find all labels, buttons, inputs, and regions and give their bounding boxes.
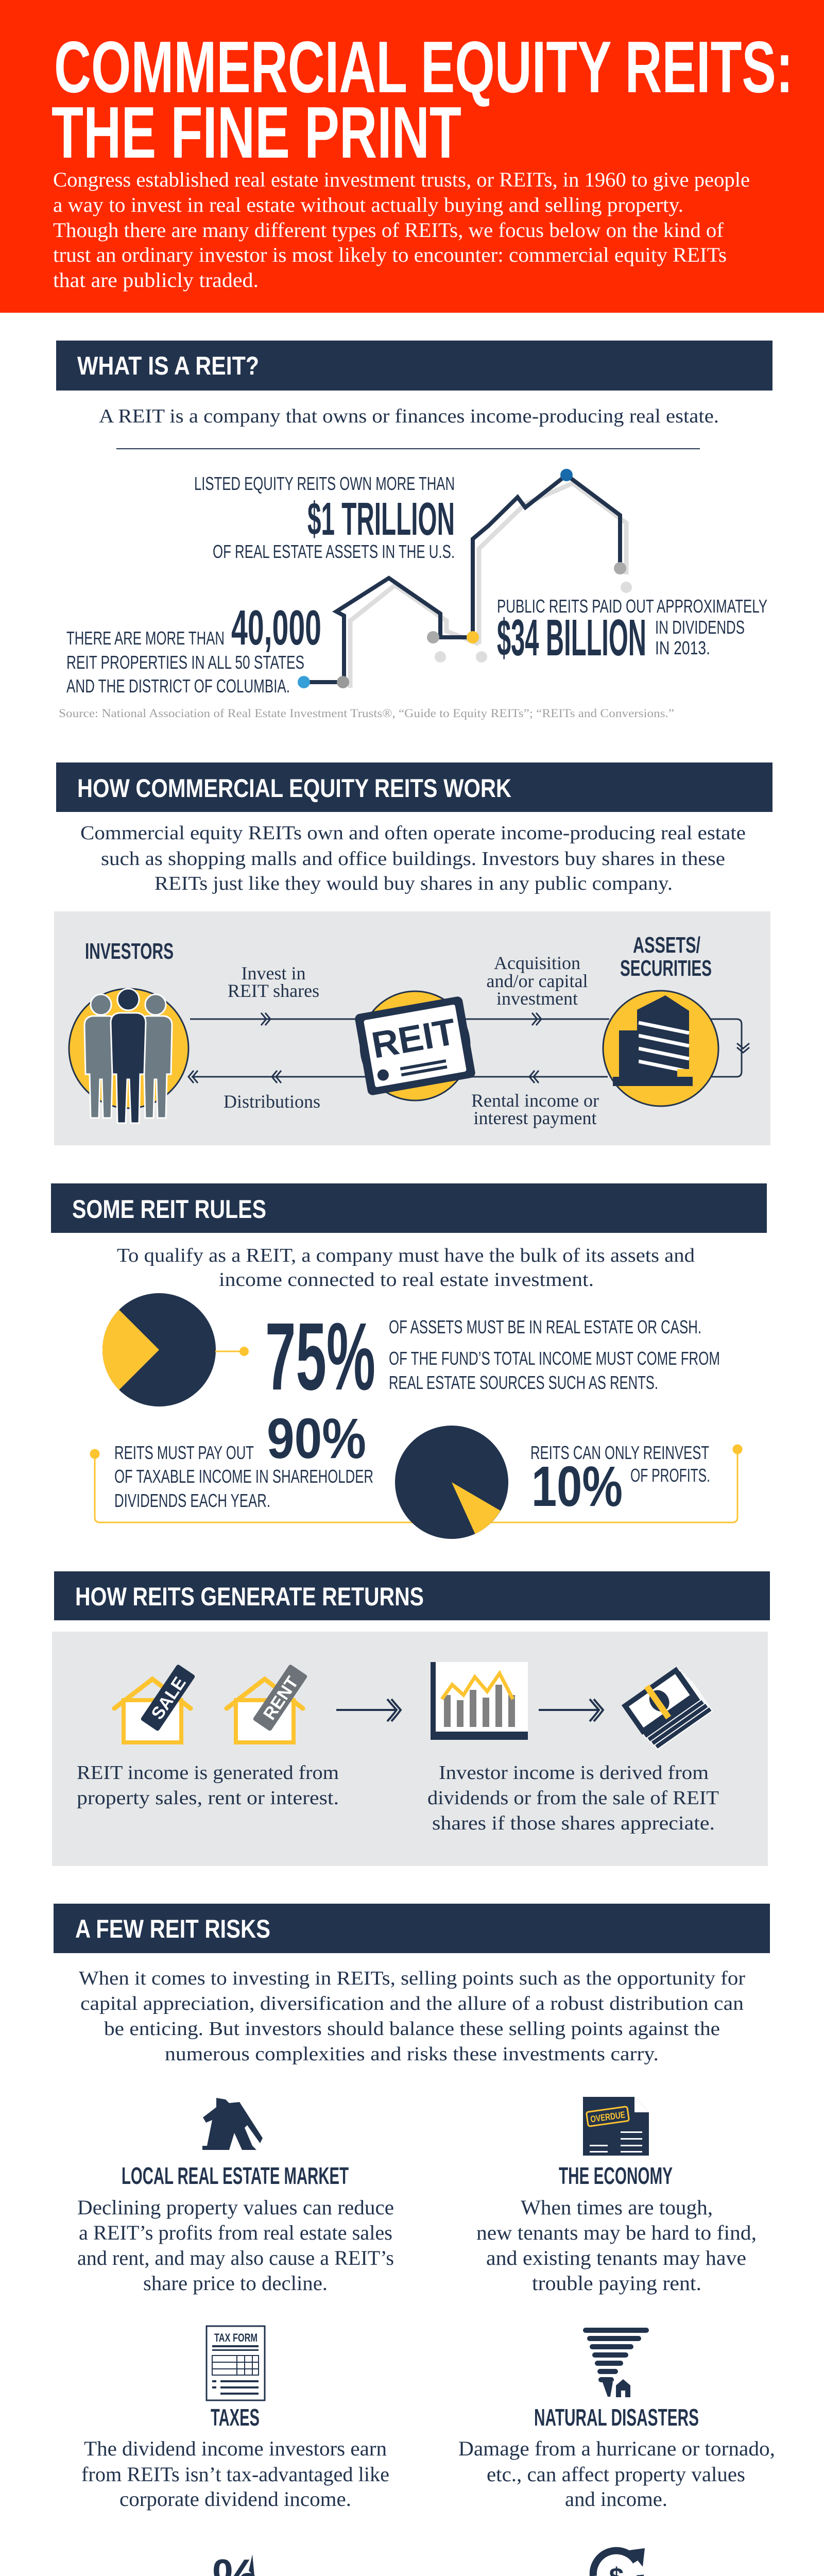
panel: flow diagram <box>54 911 770 1145</box>
intro paragraph: a way to invest in real estate without actually buying and selling property. <box>53 193 683 216</box>
rules intro: income connected to real estate investment. <box>219 1269 594 1291</box>
stat: 1 trillion: LISTED EQUITY REITS OWN MORE THAN <box>194 473 455 494</box>
stat: 10% <box>530 1442 710 1518</box>
risk: the economy <box>476 2097 757 2295</box>
bracket connector <box>91 1445 742 1522</box>
risk: the economy: new tenants may be hard to find, <box>476 2221 757 2244</box>
risks intro: be enticing. But investors should balance these selling points against the <box>104 2018 720 2040</box>
risks intro <box>79 1968 745 2065</box>
source note: Source: National Association of Real Estate Investment Trusts®, “Guide to Equity REITs”; “REITs and Conversions.” <box>59 707 674 720</box>
how it works paragraph: REITs just like they would buy shares in any public company. <box>154 873 673 894</box>
section header: how REITs generate returns: HOW REITS GENERATE RETURNS <box>75 1582 424 1611</box>
pie chart: 75% <box>102 1293 249 1406</box>
text: investor income: shares if those shares appreciate. <box>432 1812 715 1834</box>
icon: overdue bill: OVERDUE <box>590 2109 626 2125</box>
stat: 90% <box>114 1407 373 1511</box>
risk: interest rates <box>65 2549 406 2576</box>
stat: 1 trillion: OF REAL ESTATE ASSETS IN THE U.S. <box>213 541 455 562</box>
arrow labels: Distributions <box>224 1091 320 1112</box>
risk: local real estate market: a REIT’s profits from real estate sales <box>79 2221 392 2244</box>
risk: local real estate market: share price to decline. <box>143 2272 328 2295</box>
stat: 10%: OF PROFITS. <box>630 1465 710 1486</box>
risk: taxes: TAXES <box>211 2404 260 2431</box>
arrows <box>188 1013 749 1083</box>
stat: 90%: REITS MUST PAY OUT <box>114 1442 254 1463</box>
text: investor income: Investor income is derived from <box>439 1762 709 1784</box>
icon: REIT certificate <box>354 991 476 1100</box>
intro paragraph: that are publicly traded. <box>53 268 259 292</box>
stat: 40,000 properties: AND THE DISTRICT OF COLUMBIA. <box>66 675 290 697</box>
icon: house for sale <box>114 1664 196 1742</box>
intro paragraph: trust an ordinary investor is most likely to encounter: commercial equity REITs <box>53 243 727 266</box>
icon: investors <box>69 989 188 1123</box>
arrow labels: Rental income or <box>471 1090 599 1111</box>
text: REIT income: REIT income is generated from <box>77 1762 339 1784</box>
arrow labels: Invest in <box>242 963 305 984</box>
icon: tax form: TAX FORM <box>214 2331 258 2344</box>
section header: a few REIT risks <box>54 1904 770 1953</box>
risk: natural disasters: Damage from a hurricane or tornado, <box>458 2437 775 2460</box>
rules intro: To qualify as a REIT, a company must have the bulk of its assets and <box>117 1245 695 1266</box>
risk: local real estate market: Declining property values can reduce <box>77 2196 394 2219</box>
definition text: A REIT is a company that owns or finances income-producing real estate. <box>99 405 719 427</box>
stat: 90%: 90% <box>267 1407 366 1470</box>
icon: tornado <box>583 2328 649 2397</box>
risks intro: numerous complexities and risks these investments carry. <box>165 2043 659 2065</box>
icon: building <box>603 991 718 1106</box>
how it works paragraph <box>80 822 746 894</box>
stat: 40,000 properties <box>66 600 321 697</box>
text: REIT income: property sales, rent or interest. <box>77 1787 339 1809</box>
icon: REIT certificate: REIT <box>369 1011 459 1066</box>
risks intro: When it comes to investing in REITs, selling points such as the opportunity for <box>79 1968 745 1989</box>
stat: 90%: DIVIDENDS EACH YEAR. <box>114 1490 270 1511</box>
risk: taxes: The dividend income investors earn <box>84 2437 387 2460</box>
risk: local real estate market: LOCAL REAL ESTATE MARKET <box>122 2162 349 2189</box>
section header: how REITs work <box>56 762 772 812</box>
stat: 75%: OF ASSETS MUST BE IN REAL ESTATE OR CASH. <box>389 1316 701 1337</box>
stat: 75%: REAL ESTATE SOURCES SUCH AS RENTS. <box>389 1372 658 1393</box>
risk: natural disasters: NATURAL DISASTERS <box>534 2404 699 2431</box>
risk: the economy: trouble paying rent. <box>532 2272 701 2295</box>
label: assets <box>620 933 712 981</box>
how it works paragraph: such as shopping malls and office buildings. Investors buy shares in these <box>101 848 725 870</box>
risk: local real estate market: and rent, and may also cause a REIT’s <box>77 2246 394 2269</box>
risk: taxes <box>81 2326 389 2511</box>
icon: house for sale: SALE <box>148 1673 190 1723</box>
section header: some REIT rules: SOME REIT RULES <box>72 1195 266 1224</box>
stat: 1 trillion: $1 TRILLION <box>307 494 455 545</box>
arrow labels: Acquisition <box>494 953 580 973</box>
house line illustration <box>298 469 632 688</box>
arrow <box>336 1699 401 1721</box>
section header: some REIT rules <box>51 1183 767 1233</box>
pie chart: 10% <box>395 1426 508 1539</box>
risk: taxes: from REITs isn’t tax-advantaged like <box>81 2463 389 2486</box>
stat: 40,000 properties: 40,000 <box>231 600 321 655</box>
icon: dollar cycle <box>589 2548 645 2576</box>
stat: 75%: 75% <box>265 1303 375 1410</box>
label: investors: INVESTORS <box>85 939 174 964</box>
arrow labels: investment <box>496 988 578 1009</box>
arrow labels: REIT shares <box>228 980 319 1001</box>
arrow labels: interest payment <box>474 1108 596 1128</box>
stat: 34 billion: IN DIVIDENDS <box>655 617 745 638</box>
risk: the economy: THE ECONOMY <box>559 2162 673 2189</box>
arrow labels: and/or capital <box>487 971 588 991</box>
risk: the economy: and existing tenants may have <box>486 2246 746 2269</box>
stat: 40,000 properties: THERE ARE MORE THAN <box>66 628 225 649</box>
section header: a few REIT risks: A FEW REIT RISKS <box>75 1914 270 1943</box>
how it works paragraph: Commercial equity REITs own and often operate income-producing real estate <box>80 822 746 844</box>
icon: tax form <box>207 2326 265 2400</box>
risk: the economy: When times are tough, <box>521 2196 713 2219</box>
header banner <box>0 0 824 313</box>
stat: 75% <box>265 1303 720 1410</box>
arrow labels <box>224 953 599 1128</box>
icon: stock chart <box>431 1662 528 1740</box>
text: investor income <box>427 1762 719 1834</box>
stat: 10%: 10% <box>531 1455 623 1518</box>
section header: how REITs generate returns <box>54 1571 770 1620</box>
icon: collapsing house <box>202 2098 263 2150</box>
label: assets: SECURITIES <box>620 956 712 981</box>
title <box>52 26 793 174</box>
risk: local real estate market <box>77 2098 394 2295</box>
intro paragraph: Though there are many different types of REITs, we focus below on the kind of <box>53 218 724 242</box>
section header: how REITs work: HOW COMMERCIAL EQUITY REITS WORK <box>77 774 511 803</box>
intro paragraph: Congress established real estate investment trusts, or REITs, in 1960 to give people <box>53 168 750 191</box>
section header: what is a REIT: WHAT IS A REIT? <box>77 351 259 380</box>
rules intro <box>117 1245 695 1291</box>
text: investor income: dividends or from the sale of REIT <box>427 1787 719 1809</box>
risk: return of capital <box>451 2548 782 2576</box>
panel: returns <box>52 1632 768 1866</box>
risk: natural disasters <box>458 2328 775 2511</box>
risk: natural disasters: and income. <box>565 2487 667 2511</box>
label: assets: ASSETS/ <box>633 933 700 958</box>
icon: money stack <box>621 1664 712 1752</box>
stat: 10%: REITS CAN ONLY REINVEST <box>530 1442 709 1463</box>
risks intro: capital appreciation, diversification and the allure of a robust distribution can <box>80 1993 744 2014</box>
risk: taxes: corporate dividend income. <box>119 2487 351 2511</box>
intro paragraph <box>53 168 750 292</box>
arrow <box>539 1699 603 1721</box>
stat: 34 billion: IN 2013. <box>655 637 710 658</box>
title: THE FINE PRINT <box>52 92 461 174</box>
icon: overdue bill <box>583 2097 649 2156</box>
icon: house for rent <box>227 1664 308 1742</box>
text: REIT income <box>77 1762 339 1809</box>
risk: natural disasters: etc., can affect property values <box>487 2463 745 2486</box>
section header: what is a REIT <box>56 341 772 391</box>
icon: house for rent: RENT <box>260 1673 302 1723</box>
stat: 34 billion: $34 BILLION <box>497 609 646 667</box>
stat: 1 trillion <box>194 473 455 562</box>
stat: 40,000 properties: REIT PROPERTIES IN ALL 50 STATES <box>66 652 304 673</box>
stat: 90%: OF TAXABLE INCOME IN SHAREHOLDER <box>114 1466 373 1487</box>
